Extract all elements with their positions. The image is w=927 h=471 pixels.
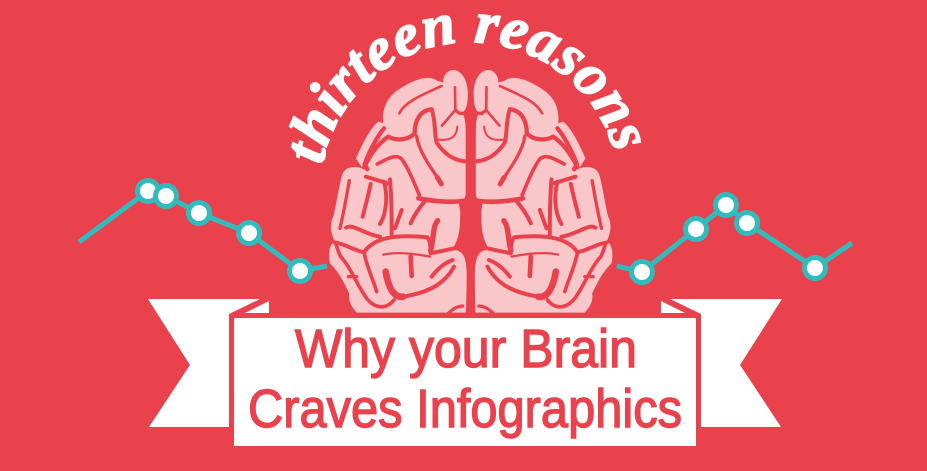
ribbon left fold (245, 301, 269, 313)
right line chart (617, 194, 852, 282)
ribbon left tail (148, 299, 260, 427)
left line chart (79, 180, 327, 282)
ribbon right tail (670, 299, 782, 427)
ribbon right fold (661, 301, 685, 313)
title line 1: Why your Brain (295, 319, 637, 379)
ribbon banner (148, 299, 782, 446)
icon: brain (329, 70, 612, 313)
title line 2: Craves Infographics (248, 379, 682, 439)
ribbon main panel (234, 318, 696, 446)
